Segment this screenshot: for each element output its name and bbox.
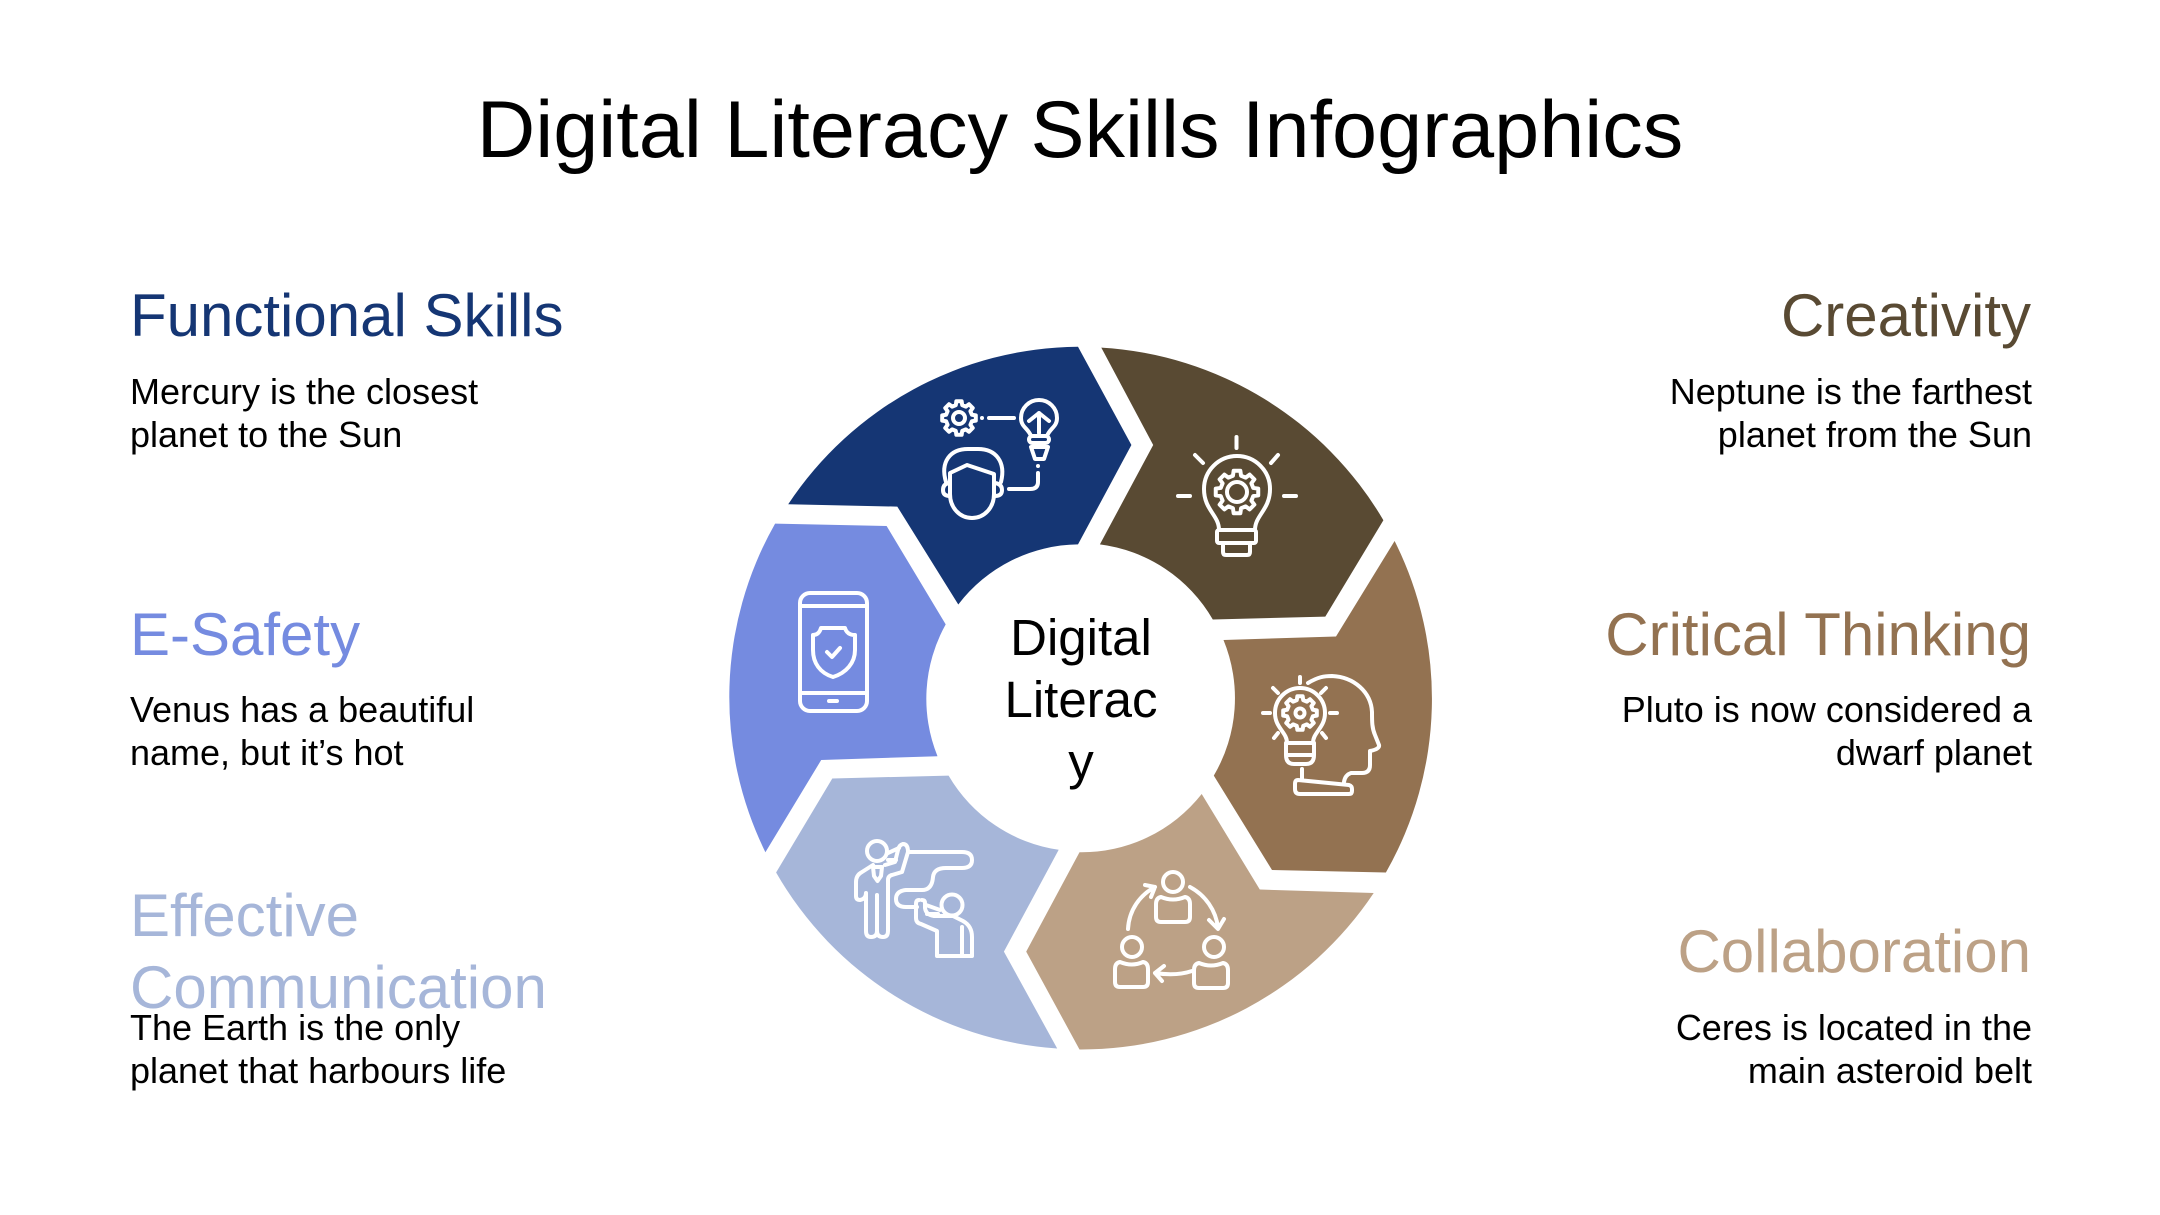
text block: Creativity: Neptune is the farthest	[1670, 371, 2032, 412]
icon: two people communicating	[856, 841, 972, 956]
icon: head with idea bulb	[1263, 676, 1379, 794]
text block: Critical Thinking: Critical Thinking	[1605, 601, 2031, 668]
segment: Collaboration	[1026, 794, 1374, 1050]
text block: E-Safety: Venus has a beautiful	[130, 689, 474, 730]
text block: Critical Thinking: dwarf planet	[1836, 732, 2032, 773]
text block: Critical Thinking	[1605, 601, 2033, 773]
center label	[1004, 609, 1158, 790]
center label: Literac	[1004, 671, 1158, 728]
text block: Collaboration: Collaboration	[1677, 918, 2031, 985]
title: Digital Literacy Skills Infographics	[477, 85, 1683, 175]
text block: Critical Thinking: Pluto is now considered a	[1622, 689, 2033, 730]
segment: Creativity	[1100, 348, 1383, 620]
text block: Functional Skills: planet to the Sun	[130, 414, 402, 455]
text block: E-Safety	[130, 601, 474, 773]
text block: Effective Communication: planet that harbours life	[130, 1050, 506, 1091]
text block: Collaboration	[1676, 918, 2032, 1091]
text block: Creativity: Creativity	[1781, 282, 2031, 349]
segment: Effective Communication	[776, 776, 1059, 1048]
text block: Collaboration: main asteroid belt	[1748, 1050, 2032, 1091]
icon: phone with shield	[800, 593, 867, 711]
text block: Functional Skills: Functional Skills	[130, 282, 564, 349]
text block: Creativity: planet from the Sun	[1718, 414, 2032, 455]
segment: Critical Thinking	[1214, 541, 1432, 872]
segment: Functional Skills	[788, 347, 1131, 604]
icon: team collaboration cycle	[1115, 872, 1228, 988]
text block: Effective Communication	[130, 882, 547, 1091]
text block: Functional Skills	[130, 282, 564, 455]
text block: Effective Communication: Communication	[130, 954, 547, 1021]
center label: Digital	[1010, 609, 1152, 666]
icon: lightbulb with gear	[1178, 437, 1296, 555]
text block: E-Safety: E-Safety	[130, 601, 360, 668]
text block: Functional Skills: Mercury is the closest	[130, 371, 478, 412]
text block: Creativity	[1670, 282, 2032, 455]
text block: E-Safety: name, but it’s hot	[130, 732, 404, 773]
text block: Collaboration: Ceres is located in the	[1676, 1007, 2032, 1048]
icon: person with gear and idea bulb	[942, 400, 1057, 518]
center label: y	[1068, 733, 1094, 790]
text block: Effective Communication: Effective	[130, 882, 359, 949]
text block: Effective Communication: The Earth is the only	[130, 1007, 460, 1048]
segment: E-Safety	[729, 524, 946, 852]
